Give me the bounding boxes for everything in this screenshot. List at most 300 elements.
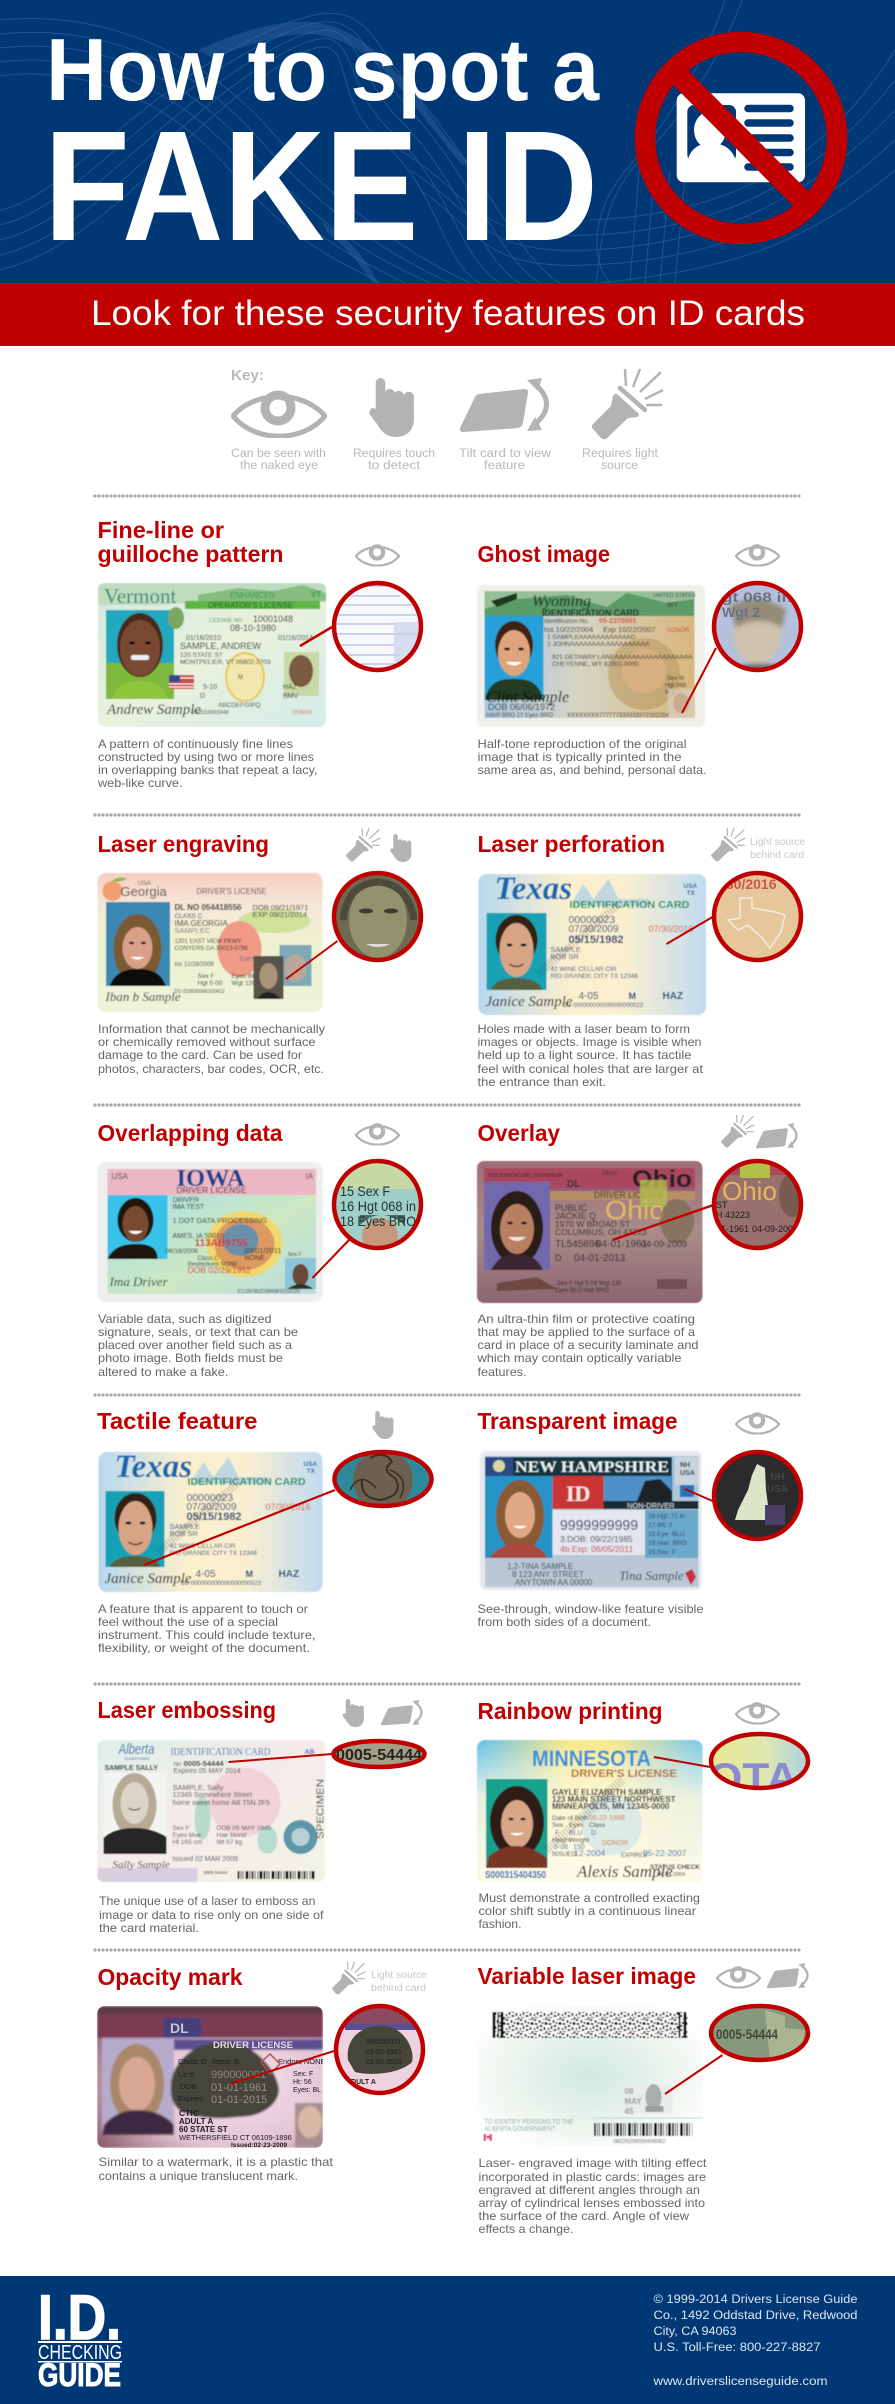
card: Texas tactile: BOB SR bbox=[170, 1529, 198, 1538]
card: Alberta: Hair blond bbox=[216, 1832, 247, 1839]
icon: flashlight with note bbox=[711, 828, 805, 862]
card: Vermont: ENHANCED bbox=[230, 591, 275, 600]
card: Alberta: Ht 165 cm bbox=[172, 1839, 202, 1846]
heading: Variable laser image bbox=[478, 1963, 696, 1989]
card: Minnesota: Sex bbox=[552, 1822, 564, 1829]
card: Minnesota: 150 bbox=[573, 1844, 585, 1851]
card: Ohio: DRIVER LICENSE bbox=[594, 1190, 664, 1200]
card: New Hampshire: 4b.Exp: 06/05/2011 bbox=[560, 1544, 633, 1554]
card: Wyoming: Wyoming bbox=[532, 593, 591, 610]
contact details: U.S. Toll-Free: 800-227-8827 bbox=[654, 2342, 820, 2354]
icon: flashlight with note: Light source bbox=[750, 836, 805, 848]
panel: tactile feature bbox=[97, 1408, 434, 1655]
card: Minnesota: 05-22-1958 bbox=[589, 1815, 625, 1822]
description bbox=[97, 737, 318, 790]
card: New Hampshire: ID bbox=[566, 1481, 590, 1506]
card: Texas: SAMPLE bbox=[550, 945, 581, 954]
callout lens: tactile swirl bbox=[144, 1450, 434, 1565]
card: Ohio bbox=[477, 1161, 702, 1303]
card: Iowa: DRIVER LICENSE bbox=[176, 1185, 247, 1195]
card: Iowa: IOWA bbox=[176, 1166, 245, 1192]
callout lens: overlay hologram: H 43223 bbox=[716, 1210, 750, 1220]
card: Iowa: 511397852D0959F010311N bbox=[238, 1289, 300, 1295]
card: Iowa: 03/01/2011 bbox=[244, 1246, 281, 1255]
card: Ohio: 04-01-1961 bbox=[596, 1239, 648, 1250]
description: card in place of a security laminate and bbox=[478, 1338, 698, 1352]
card: Texas: IDENTIFICATION CARD bbox=[570, 899, 690, 911]
card: Vermont: 5-10 bbox=[203, 684, 217, 691]
subtitle band: Look for these security features on ID cards bbox=[91, 294, 805, 333]
card: Texas: Janice Sample bbox=[486, 994, 573, 1010]
card: opacity mark: Restr: B bbox=[212, 2057, 239, 2066]
card: Texas tactile: USA bbox=[304, 1461, 318, 1468]
callout lens: ghost image: gt 068 in bbox=[722, 589, 792, 605]
card: Alberta: SAMPLE SALLY bbox=[104, 1765, 158, 1772]
panel: transparent image bbox=[478, 1408, 804, 1629]
callout lens: transparent window: NH bbox=[770, 1472, 784, 1483]
card: Texas: 42 WINE CELLAR CIR bbox=[550, 966, 617, 973]
icon: flashlight bbox=[721, 1115, 754, 1148]
card: New Hampshire: 17.Wt: 2 bbox=[648, 1522, 673, 1529]
card: Iowa: NONE bbox=[244, 1255, 265, 1262]
card: Wyoming: Iss 10/22/2004 bbox=[544, 625, 593, 634]
footer bbox=[0, 2276, 895, 2404]
icon: eye key bbox=[233, 395, 325, 436]
logo: I.D. Checking Guide bbox=[38, 2283, 122, 2393]
card: Wyoming: Identification No. bbox=[544, 619, 589, 625]
card: opacity mark: Issued:02-23-2009 bbox=[231, 2142, 287, 2149]
card: New Hampshire bbox=[480, 1451, 702, 1590]
card: Wyoming: HAIR BRO 17 Eyes BRO bbox=[486, 713, 553, 719]
callout lens: perforated state: /30/2016 bbox=[722, 876, 777, 892]
icon: tilt bbox=[381, 1700, 421, 1725]
card: New Hampshire: ANYTOWN AA 00000 bbox=[515, 1578, 593, 1587]
description bbox=[478, 737, 706, 777]
description: same area as, and behind, personal data. bbox=[478, 763, 706, 777]
card: Vermont: M bbox=[238, 675, 243, 681]
callout lens: overlapping text bbox=[312, 1159, 424, 1278]
card: Texas: 00000023 bbox=[568, 914, 615, 926]
card: Texas tactile: DD 000000000000000000023 bbox=[180, 1581, 262, 1587]
card: Alberta back: 08 bbox=[624, 2087, 634, 2096]
card: Minnesota: Class bbox=[589, 1822, 606, 1829]
description bbox=[476, 1312, 698, 1379]
description: Half-tone reproduction of the original bbox=[478, 737, 686, 751]
panel: overlapping data bbox=[98, 1120, 424, 1379]
card: Wyoming: Exp 10/22/2007 bbox=[603, 625, 656, 634]
callout lens: embossed number bbox=[228, 1739, 427, 1770]
card: Alberta back: TO IDENTIFY PERSONS TO THE bbox=[484, 2119, 574, 2126]
card: Georgia: Iss 12/28/2009 bbox=[174, 962, 215, 968]
icon: hand key bbox=[369, 378, 414, 437]
description: damage to the card. Can be used for bbox=[98, 1048, 302, 1062]
callout lens: rainbow letters: OTA bbox=[708, 1754, 798, 1801]
card: Wyoming: DONOR bbox=[667, 628, 690, 634]
card: Ohio: Ohio bbox=[632, 1166, 692, 1193]
description: that may be applied to the surface of a bbox=[478, 1325, 695, 1339]
card: Texas tactile: 05/15/1982 bbox=[186, 1511, 242, 1523]
callout lens: laser number: 0005-54444 bbox=[716, 2026, 778, 2042]
description: held up to a light source. It has tactile bbox=[478, 1048, 692, 1062]
description: the card material. bbox=[99, 1921, 199, 1935]
heading: Laser embossing bbox=[98, 1697, 276, 1723]
card: Alberta: 0005-54444 bbox=[204, 1870, 228, 1875]
card: New Hampshire: NEW HAMPSHIRE bbox=[515, 1459, 669, 1476]
card: Georgia: DOB 09/21/1971 bbox=[252, 903, 308, 912]
description: signature, seals, or text that can be bbox=[98, 1325, 298, 1339]
card: opacity mark: Expires bbox=[178, 2094, 203, 2103]
card: Texas: BOB SR bbox=[550, 952, 579, 961]
heading: Opacity mark bbox=[98, 1964, 243, 1990]
contact details bbox=[652, 2294, 858, 2388]
callout lens: transparent window bbox=[685, 1450, 804, 1542]
card: Georgia: USA bbox=[138, 880, 152, 887]
card: Vermont: ABCDEFGIPQ bbox=[218, 702, 261, 709]
icon: eye bbox=[736, 546, 779, 566]
callout lens: overlay hologram: ST bbox=[716, 1200, 728, 1210]
icon: hand bbox=[343, 1699, 364, 1727]
card: Minnesota: 123 MAIN STREET NORTHWEST bbox=[552, 1795, 676, 1804]
description: See-through, window-like feature visible bbox=[478, 1602, 704, 1616]
card: Alberta: No bbox=[174, 1762, 182, 1768]
description: Laser- engraved image with tilting effect bbox=[478, 2156, 707, 2170]
card: Texas tactile: M bbox=[246, 1569, 253, 1579]
card: Ohio: D bbox=[555, 1253, 562, 1263]
card: Ohio: PUBLIC bbox=[555, 1203, 588, 1213]
card: opacity mark: Endors NONE bbox=[278, 2057, 326, 2066]
description: Information that cannot be mechanically bbox=[98, 1022, 325, 1036]
card: Texas: Texas bbox=[494, 871, 572, 907]
card: opacity mark: Eyes: BL bbox=[293, 2087, 321, 2094]
card: Ohio: Eyes BLU Hair BRO bbox=[555, 1288, 609, 1294]
card: opacity mark: 01-01-1961 bbox=[211, 2082, 267, 2094]
icon: flashlight bbox=[346, 828, 380, 862]
callout lens: overlay hologram: 04-09-2009 bbox=[752, 1224, 798, 1234]
card: Ohio: TL545896 bbox=[555, 1239, 600, 1250]
card: Iowa: IMA TEST bbox=[172, 1204, 205, 1211]
description: which may contain optically variable bbox=[476, 1351, 682, 1365]
card: Alberta back: 45 bbox=[624, 2107, 634, 2116]
card: Georgia: Sex F bbox=[198, 973, 215, 980]
description: contains a unique translucent mark. bbox=[98, 2169, 298, 2183]
description: photos, characters, bar codes, OCR, etc. bbox=[98, 1062, 324, 1076]
card: Minnesota: Eyes bbox=[569, 1822, 584, 1829]
description: Must demonstrate a controlled exacting bbox=[478, 1891, 700, 1905]
panel: ghost image bbox=[477, 541, 804, 777]
icon: hand bbox=[390, 834, 411, 862]
card: New Hampshire: 18.Eye: BLU bbox=[648, 1531, 685, 1538]
callout lens: laser number bbox=[665, 2004, 811, 2094]
card: Georgia: Hgt 5-00 bbox=[198, 980, 223, 987]
callout lens: fine lines bbox=[300, 581, 424, 673]
card: opacity mark: Lic #: bbox=[178, 2070, 196, 2079]
description: Variable data, such as digitized bbox=[98, 1312, 272, 1326]
card: Wyoming: Sex M bbox=[667, 676, 684, 682]
card: Ohio: 04-01-2013 bbox=[574, 1253, 626, 1264]
card: Wyoming: IDENTIFICATION CARD bbox=[542, 608, 639, 619]
card: Minnesota: DONOR bbox=[602, 1840, 628, 1847]
card: Alberta: 12345 Somewhere Street bbox=[172, 1792, 252, 1799]
callout lens: overlay hologram: 01-1961 bbox=[716, 1224, 749, 1234]
description: the entrance than exit. bbox=[478, 1075, 606, 1089]
callout lens: ghost image: Wgt 2 bbox=[722, 604, 760, 620]
card: Georgia: End NONE bbox=[240, 957, 269, 963]
panel: opacity mark bbox=[97, 1962, 427, 2183]
callout lens: overlapping text: 18 Eyes BRO bbox=[340, 1213, 416, 1229]
icon: eye bbox=[356, 1125, 399, 1145]
description: placed over another field such as a bbox=[98, 1338, 292, 1352]
card: Vermont bbox=[98, 583, 326, 727]
description bbox=[478, 2156, 707, 2236]
icon: hand bbox=[372, 1411, 393, 1439]
card: Vermont: HAZ bbox=[283, 684, 298, 691]
description: web-like curve. bbox=[97, 776, 182, 790]
subtitle band bbox=[0, 283, 895, 346]
card: New Hampshire: 3.DOB: 09/22/1985 bbox=[560, 1534, 633, 1544]
card: Wyoming: DOB 06/06/1972 bbox=[488, 702, 555, 712]
card: Ohio: DL bbox=[567, 1179, 580, 1190]
card: Georgia: 1201 EAST VIEW PKWY bbox=[174, 939, 241, 945]
description bbox=[98, 1312, 298, 1379]
card: Texas tactile: RIO GRANDE CITY TX 12346 bbox=[170, 1550, 257, 1557]
key captions: the naked eye bbox=[240, 460, 318, 472]
card: Vermont: 262010001048 bbox=[192, 710, 229, 716]
card: opacity mark: Sex: F bbox=[293, 2071, 313, 2078]
card: Texas: TX bbox=[686, 890, 695, 897]
key captions bbox=[231, 448, 659, 472]
card: Wyoming: 05-2370001 bbox=[599, 618, 636, 625]
card: Georgia: IMA GEORGIA bbox=[174, 919, 229, 928]
card: Minnesota: MINNESOTA bbox=[532, 1746, 651, 1771]
card: Vermont: Vermont bbox=[104, 584, 176, 608]
description: Similar to a watermark, it is a plastic that bbox=[98, 2155, 334, 2169]
card: Ohio: TED STRICKLAND, GOVERNOR bbox=[488, 1173, 563, 1179]
callout lens: opacity mark: ADULT A bbox=[346, 2079, 376, 2086]
panel: fine-line or guilloche pattern bbox=[97, 517, 424, 790]
card: Vermont: LICENSE NO bbox=[209, 618, 243, 624]
card: Minnesota: D bbox=[591, 1830, 596, 1837]
card: Minnesota: S000315404350 bbox=[485, 1870, 546, 1881]
card: Iowa: 1 DOT DATA PROCESSING bbox=[172, 1216, 267, 1225]
card: New Hampshire: 19.Hair: BRO bbox=[648, 1540, 687, 1547]
heading: Tactile feature bbox=[97, 1408, 258, 1434]
callout lens: opacity mark bbox=[230, 2004, 426, 2096]
contact details: City, CA 94063 bbox=[654, 2326, 736, 2338]
description bbox=[98, 2155, 334, 2183]
card: Wyoming: 921 GETAWAY LANEAAAAAAAAAAAAAAAAAA bbox=[552, 654, 693, 661]
description: An ultra-thin film or protective coating bbox=[478, 1312, 695, 1326]
card: Iowa: DOB 02/29/1952 bbox=[188, 1265, 251, 1275]
callout lens: overlapping text: 16 Hgt 068 in bbox=[340, 1198, 416, 1214]
callout lens: overlay hologram bbox=[612, 1159, 805, 1251]
card: New Hampshire: 16.Hgt: 71 in bbox=[648, 1513, 685, 1520]
card: Minnesota: Weight bbox=[569, 1837, 589, 1844]
callout lens: engraved face bbox=[286, 871, 424, 979]
card: Minnesota: ISSUED bbox=[552, 1851, 577, 1858]
card: Minnesota: F bbox=[555, 1830, 559, 1837]
card: Texas: 05/15/1982 bbox=[568, 934, 624, 946]
card: Alberta: SAMPLE, Sally bbox=[172, 1783, 224, 1792]
card: Alberta: home sweet home AB T5N 2F5 bbox=[172, 1800, 270, 1807]
description: engraved at different angles through an bbox=[478, 2183, 700, 2197]
callout lens: opacity mark: 01-01-1961 bbox=[366, 2049, 402, 2056]
heading: Fine-line or bbox=[98, 517, 224, 543]
contact details: www.driverslicenseguide.com bbox=[652, 2376, 828, 2388]
card: Minnesota: 06-24-2004 bbox=[657, 1872, 685, 1878]
card: Alberta: Issued 02 MAR 2009 bbox=[172, 1856, 238, 1863]
card: Vermont: MONTPELIER, VT 05602-2703 bbox=[180, 659, 271, 666]
key captions: Can be seen with bbox=[231, 448, 326, 460]
card: Texas tactile: SAMPLE bbox=[170, 1522, 200, 1531]
card: Minnesota: 12-2004 bbox=[574, 1848, 605, 1858]
card: Texas bbox=[478, 871, 706, 1015]
card: Georgia: Georgia bbox=[120, 884, 168, 899]
description: feel with conical holes that are larger at bbox=[478, 1062, 704, 1076]
card: Wyoming: Clint Sample bbox=[486, 689, 569, 706]
description: color shift subtly in a continuous linear bbox=[478, 1904, 696, 1918]
description: image or data to rise only on one side of bbox=[99, 1908, 324, 1922]
card: Alberta: DOB 05 MAY 1945 bbox=[216, 1825, 272, 1832]
description bbox=[98, 1602, 316, 1655]
card: Alberta: Wt 57 kg bbox=[216, 1839, 243, 1846]
card: opacity mark: WETHERSFIELD CT 06109-1896 bbox=[179, 2133, 292, 2142]
description: instrument. This could include texture, bbox=[98, 1628, 316, 1642]
card: New Hampshire: 8 123 ANY STREET bbox=[512, 1570, 584, 1579]
callout lens: transparent window: USA bbox=[767, 1484, 788, 1495]
description: or chemically removed without surface bbox=[98, 1035, 316, 1049]
card: Wyoming: WY bbox=[667, 602, 679, 609]
card: Georgia: DL NO 054418556 bbox=[174, 903, 242, 912]
card: Alberta: AB bbox=[304, 1749, 315, 1756]
panel: laser embossing bbox=[98, 1697, 427, 1935]
title: FAKE ID bbox=[44, 99, 598, 274]
heading: Overlay bbox=[478, 1120, 560, 1146]
card: Ohio: JACKIE Q bbox=[555, 1211, 596, 1221]
card: opacity mark: DOB: bbox=[180, 2082, 198, 2091]
card: Georgia: Iban b Sample bbox=[104, 989, 181, 1004]
card: Ohio: 04-09-2009 bbox=[641, 1239, 687, 1249]
panel: variable laser image bbox=[478, 1963, 811, 2236]
card: opacity mark: DL bbox=[170, 2020, 189, 2036]
heading bbox=[98, 517, 284, 567]
card: Wyoming: XXXXXXXX777777333333372102204 bbox=[567, 713, 670, 719]
card: Georgia bbox=[98, 873, 322, 1012]
card: Alberta: Alberta bbox=[118, 1741, 154, 1758]
title: How to spot a bbox=[46, 20, 600, 119]
card: opacity mark: 01-01-2015 bbox=[211, 2094, 267, 2106]
card: Alberta back: 08229200030498082 bbox=[614, 2139, 666, 2145]
card: Wyoming bbox=[477, 585, 705, 727]
icon: tilt key bbox=[460, 378, 547, 432]
card: Iowa: AMES, IA 50010 bbox=[172, 1233, 224, 1240]
description: image that is typically printed in the bbox=[478, 750, 682, 764]
contact details: Co., 1492 Oddstad Drive, Redwood bbox=[654, 2310, 858, 2322]
card: Alberta back: ALBERTA GOVERNMENT bbox=[484, 2126, 556, 2133]
card: Minnesota: STATUS CHECK bbox=[650, 1864, 700, 1871]
card: opacity mark: Ht: 56 bbox=[293, 2079, 312, 2086]
callout lens: opacity mark: 990000001 bbox=[366, 2039, 401, 2046]
card: Alberta: Sally Sample bbox=[112, 1859, 170, 1871]
card: Minnesota: Height bbox=[552, 1837, 571, 1844]
title bbox=[44, 20, 600, 274]
card: Texas tactile: 07/30/2016 bbox=[266, 1502, 311, 1512]
card: Texas: HAZ bbox=[662, 991, 683, 1002]
card: New Hampshire: NH bbox=[680, 1462, 690, 1469]
heading: Laser perforation bbox=[478, 831, 665, 857]
callout lens: opacity mark: 01-01-2015 bbox=[366, 2059, 402, 2066]
card: New Hampshire: 9999999999 bbox=[560, 1517, 638, 1534]
description: from both sides of a document. bbox=[478, 1615, 651, 1629]
card: Vermont: 120 STATE ST bbox=[180, 652, 223, 659]
card: Texas tactile: Janice Sample bbox=[104, 1571, 192, 1587]
card: Georgia: CLASS C bbox=[174, 913, 203, 920]
card: New Hampshire: 15.Sex: F bbox=[648, 1549, 676, 1556]
card: Wyoming: UNITED STATES bbox=[653, 593, 696, 599]
card: opacity mark: DRIVER LICENSE bbox=[213, 2040, 293, 2050]
card: Iowa: Ima Driver bbox=[108, 1274, 169, 1289]
panel: rainbow printing bbox=[477, 1698, 811, 1931]
card: opacity mark: CTIC bbox=[179, 2108, 199, 2118]
heading: Transparent image bbox=[478, 1408, 678, 1434]
card: opacity mark: Class: D bbox=[178, 2057, 207, 2066]
icon: eye bbox=[717, 1968, 760, 1988]
icon: flashlight with note: behind card bbox=[750, 849, 804, 861]
panel: laser perforation bbox=[478, 828, 805, 1089]
icon: flashlight with note bbox=[332, 1962, 427, 1995]
contact details: © 1999-2014 Drivers License Guide bbox=[654, 2294, 858, 2306]
card: Texas tactile: Texas bbox=[114, 1449, 192, 1485]
card: Georgia: DD 018500000100412 bbox=[174, 989, 225, 995]
description: the surface of the card. Angle of view bbox=[478, 2209, 689, 2223]
logo: I.D. Checking Guide: I.D. bbox=[38, 2283, 121, 2353]
callout lens: ghost image bbox=[682, 581, 804, 713]
card: Ohio: Sex F Hgt 5-08 Wgt 135 bbox=[557, 1281, 622, 1287]
description: constructed by using two or more lines bbox=[98, 750, 314, 764]
description bbox=[99, 1894, 324, 1935]
description: incorporated in plastic cards: images are bbox=[478, 2170, 706, 2184]
heading: guilloche pattern bbox=[98, 541, 284, 567]
card: Georgia: EXP 09/21/2014 bbox=[252, 910, 307, 919]
description: fashion. bbox=[478, 1917, 522, 1931]
card: Iowa bbox=[98, 1162, 322, 1302]
card: opacity mark: ADULT A bbox=[179, 2117, 213, 2126]
card: Iowa: Restrictions NONE bbox=[188, 1262, 238, 1268]
icon: tilt bbox=[756, 1123, 796, 1148]
card: Iowa: 06/18/2006 bbox=[166, 1248, 198, 1255]
card: Alberta: Expires 05 MAY 2014 bbox=[174, 1768, 241, 1775]
card: Minnesota: MINNEAPOLIS, MN 12345-0000 bbox=[552, 1802, 670, 1811]
description: flexibility, or weight of the document. bbox=[98, 1641, 310, 1655]
card: Ohio: 1970 W BROAD ST bbox=[555, 1219, 630, 1229]
heading: Rainbow printing bbox=[478, 1698, 662, 1724]
card: Texas tactile: 4-05 bbox=[196, 1569, 216, 1580]
card: Texas: RIO GRANDE CITY TX 12346 bbox=[550, 973, 638, 980]
card: Texas tactile bbox=[98, 1449, 322, 1592]
icon: prohibited id card bbox=[645, 42, 837, 234]
card: Minnesota: Alexis Sample bbox=[576, 1862, 673, 1881]
card: opacity mark: 60 STATE ST bbox=[179, 2125, 228, 2134]
card: Minnesota: BLU bbox=[569, 1830, 583, 1837]
icon: eye bbox=[356, 546, 399, 566]
card: Texas: 07/30/2016 bbox=[648, 924, 694, 934]
card: Texas: M bbox=[628, 991, 636, 1001]
description: in overlapping banks that repeat a lacy, bbox=[98, 763, 318, 777]
description: feel without the use of a special bbox=[98, 1615, 278, 1629]
card: New Hampshire: 1,2-TINA SAMPLE bbox=[507, 1562, 573, 1571]
card: Minnesota: 05-22-2007 bbox=[643, 1848, 687, 1858]
card: Iowa: USA bbox=[112, 1172, 129, 1181]
card: Georgia: CONYERS GA 30013-5766 bbox=[174, 946, 249, 952]
